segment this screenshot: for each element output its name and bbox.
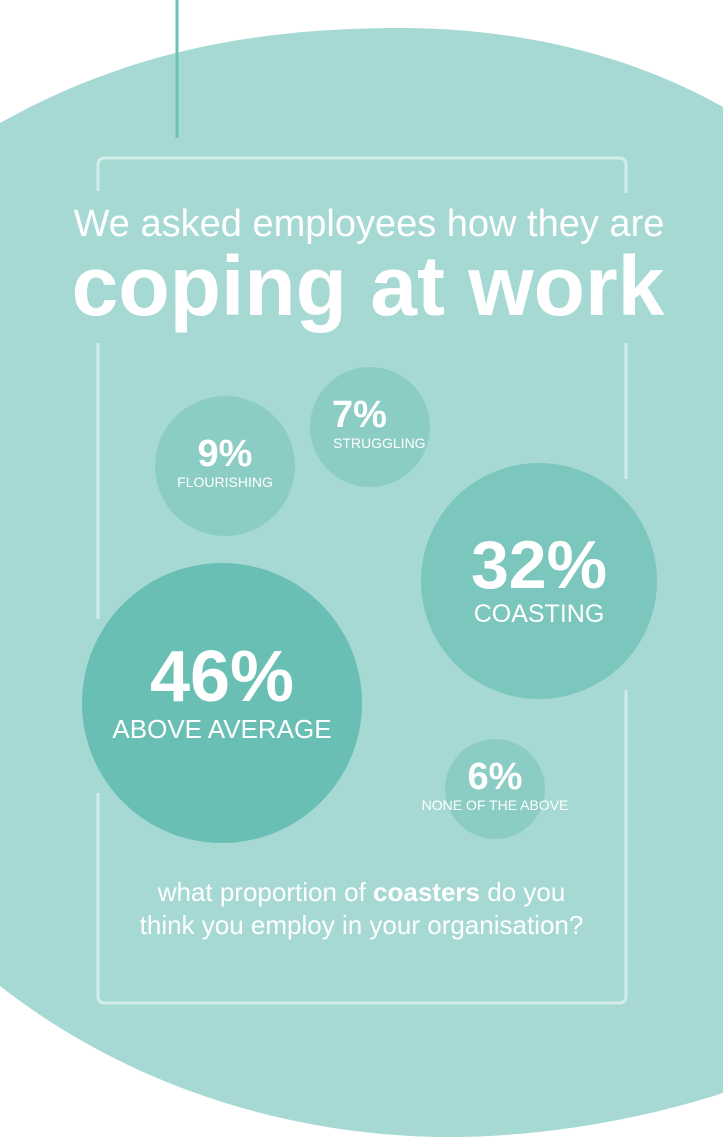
question text	[140, 877, 583, 940]
46% above average: ABOVE AVERAGE	[112, 714, 332, 744]
46% above average: 46%	[150, 637, 294, 717]
9% flourishing	[177, 433, 273, 490]
32% coasting: 32%	[471, 527, 607, 603]
question text: think you employ in your organisation?	[140, 910, 583, 940]
7% struggling: STRUGGLING	[333, 435, 426, 451]
title main: coping at work	[72, 239, 664, 333]
46% above average	[112, 637, 332, 744]
6% none of the above: NONE OF THE ABOVE	[422, 797, 568, 813]
9% flourishing: 9%	[198, 433, 252, 475]
6% none of the above	[422, 756, 568, 813]
title: We asked employees how they are	[74, 203, 664, 245]
32% coasting: COASTING	[474, 600, 604, 628]
question text: what proportion of coasters do you	[158, 877, 565, 907]
9% flourishing: FLOURISHING	[177, 474, 273, 490]
7% struggling	[332, 394, 426, 451]
6% none of the above: 6%	[468, 756, 522, 798]
7% struggling: 7%	[332, 394, 387, 436]
